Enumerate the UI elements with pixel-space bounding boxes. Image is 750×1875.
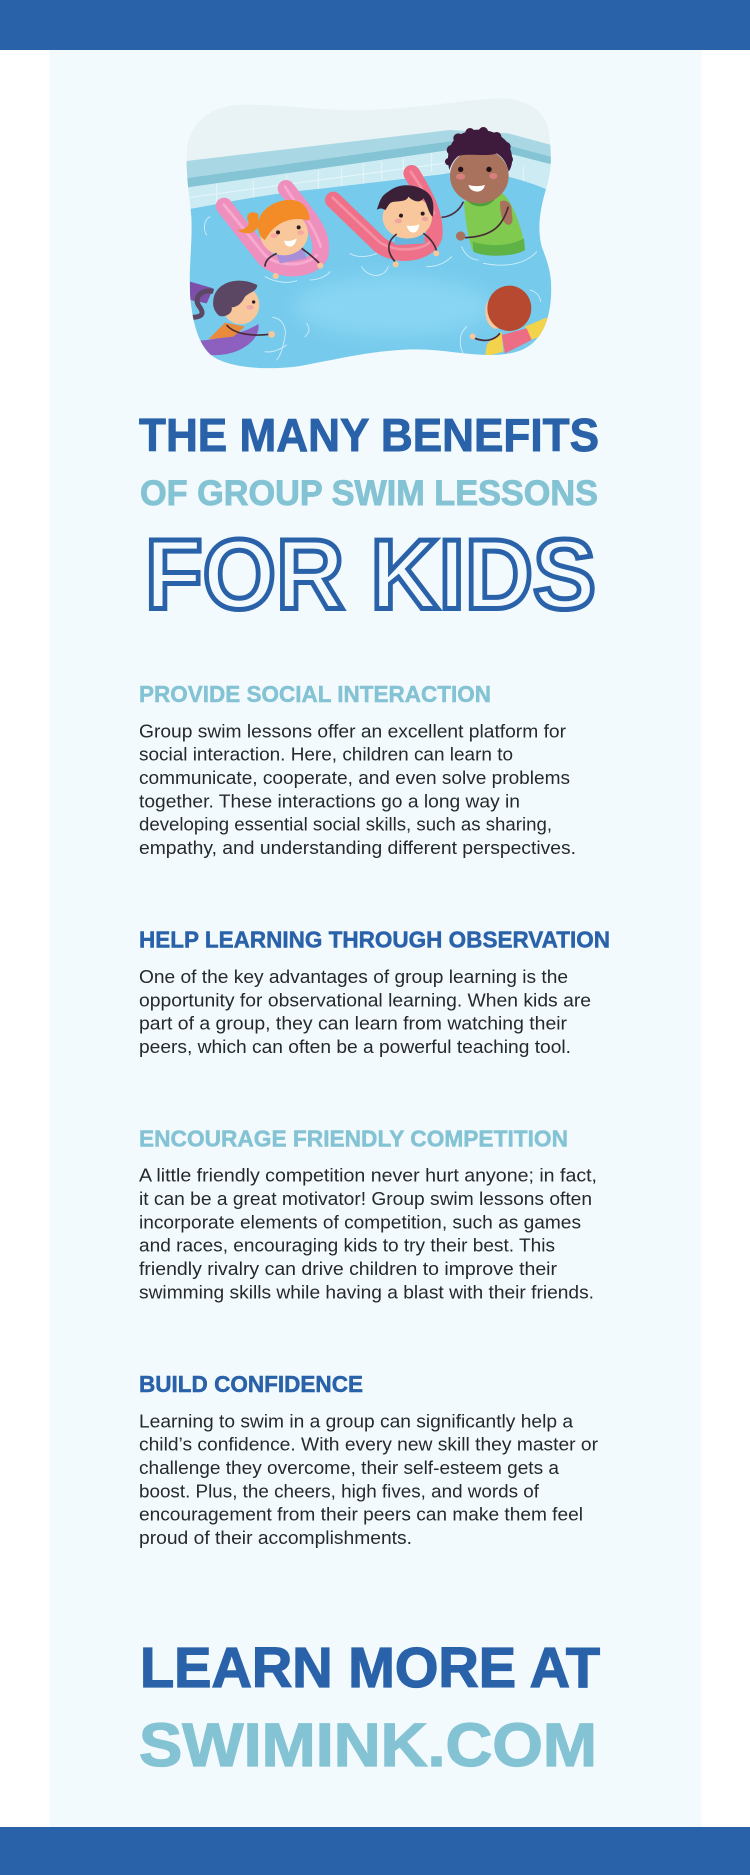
child 3 in purple ring — [190, 281, 275, 355]
call to action — [139, 1636, 600, 1779]
pool wall — [187, 98, 550, 180]
body text: proud of their accomplishments. — [139, 1528, 412, 1548]
curly hair — [448, 130, 512, 172]
body text: social interaction. Here, children can learn to — [139, 745, 513, 765]
body text: peers, which can often be a powerful teaching tool. — [139, 1037, 571, 1057]
heading: HELP LEARNING THROUGH OBSERVATION — [139, 927, 610, 953]
body text — [139, 1166, 597, 1302]
heading: ENCOURAGE FRIENDLY COMPETITION — [139, 1126, 568, 1152]
body text: and races, encouraging kids to try their best. This — [139, 1236, 555, 1256]
body text: friendly rivalry can drive children to improve their — [139, 1259, 557, 1279]
body text: incorporate elements of competition, such as games — [139, 1212, 581, 1232]
body text: part of a group, they can learn from watching their — [139, 1014, 567, 1034]
body text: A little friendly competition never hurt anyone; in fact, — [139, 1166, 597, 1186]
title line 1: THE MANY BENEFITS — [139, 409, 599, 461]
section: provide social interaction — [139, 681, 576, 858]
body text — [139, 1411, 598, 1548]
body text: challenge they overcome, their self-esteem gets a — [139, 1458, 560, 1478]
learn more at: LEARN MORE AT — [140, 1636, 600, 1700]
top bar — [0, 0, 750, 50]
pool water — [183, 172, 557, 370]
body text: swimming skills while having a blast with their friends. — [139, 1282, 594, 1302]
child 4 from behind with yellow float — [470, 286, 550, 357]
child 1 with pink noodle — [224, 187, 323, 279]
title line 3 outlined: FOR KIDS — [145, 518, 596, 630]
section: build confidence — [139, 1371, 598, 1548]
body text: boost. Plus, the cheers, high fives, and words of — [139, 1481, 540, 1501]
pool coping dark stripe — [183, 141, 555, 189]
title line 2: OF GROUP SWIM LESSONS — [140, 474, 598, 513]
body text: together. These interactions go a long way in — [139, 791, 520, 811]
heading: PROVIDE SOCIAL INTERACTION — [139, 681, 491, 707]
body text: child’s confidence. With every new skill they master or — [139, 1435, 598, 1455]
title — [139, 409, 599, 630]
body text: developing essential social skills, such as sharing, — [139, 815, 552, 835]
body text — [139, 721, 576, 858]
child 2 with red noodle — [333, 172, 439, 267]
body text: empathy, and understanding different perspectives. — [139, 838, 576, 858]
illustration: children in swim lesson — [183, 93, 557, 370]
heading: BUILD CONFIDENCE — [139, 1371, 363, 1397]
tile grid lines — [190, 153, 523, 203]
pool coping band — [183, 130, 555, 189]
body text: Group swim lessons offer an excellent platform for — [139, 721, 566, 741]
body text: One of the key advantages of group learning is the — [139, 967, 568, 987]
body text: it can be a great motivator! Group swim lessons often — [139, 1189, 592, 1209]
body text: encouragement from their peers can make them feel — [139, 1505, 583, 1525]
body text: opportunity for observational learning. When kids are — [139, 990, 591, 1010]
section: encourage friendly competition — [139, 1126, 597, 1302]
section: help learning through observation — [139, 927, 610, 1057]
body text — [139, 967, 591, 1057]
website: SWIMINK.COM — [139, 1711, 597, 1779]
bottom bar — [0, 1827, 750, 1875]
body text: communicate, cooperate, and even solve problems — [139, 768, 570, 788]
pool tiles — [183, 150, 555, 210]
instructor — [442, 127, 525, 256]
body text: Learning to swim in a group can significantly help a — [139, 1411, 574, 1431]
lighter water patch — [293, 277, 493, 337]
water ripples — [204, 217, 541, 360]
